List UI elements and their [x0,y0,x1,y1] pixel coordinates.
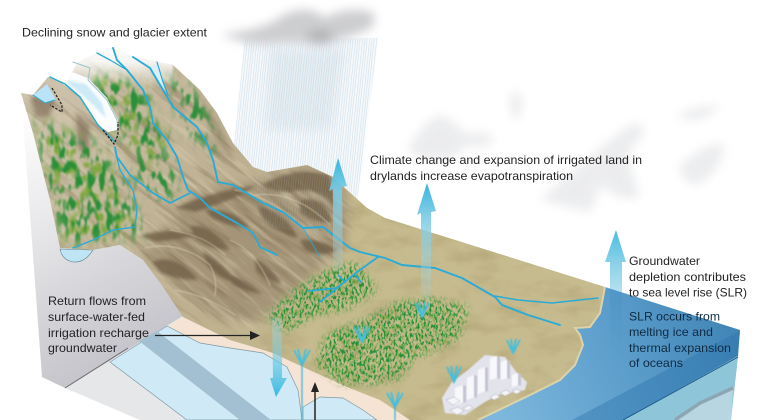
hill massif [145,165,350,320]
text: return flows [48,294,149,355]
well 3 [415,302,429,317]
layer: shallow aquifer [110,326,302,420]
arrow: evapotranspiration from hill [329,158,347,272]
arrow: evapotranspiration from fields [417,183,436,300]
panel: coastal front block [623,357,738,420]
lake [60,249,93,262]
arrow: groundwater to sea level [605,230,626,360]
divider line on wall [65,348,128,388]
plains relief [264,204,596,420]
well 4 [507,339,520,353]
panel: land surface [0,40,620,420]
mountain forest [36,68,218,245]
irrigation canals [308,257,378,302]
text: groundwater depletion: depletion contributes [629,270,746,284]
wells [294,302,520,420]
text: SLR causes: melting ice and [629,325,713,339]
faint rain over the hill [255,170,345,240]
well 5 [447,366,461,382]
text: groundwater depletion: to sea level rise (SLR) [629,286,747,300]
sand fringe [478,287,605,420]
text: climate change: Climate change and expansion of irrigated land in [370,153,642,167]
sea darker strip [572,331,740,420]
irrigated trees: upper field [266,263,378,332]
irrigated trees: lower field [316,298,468,384]
layer: second aquifer [303,397,377,420]
text: return flows: irrigation recharge [48,326,149,340]
text: SLR causes [629,310,731,370]
mountain shading [30,86,235,165]
well 2 [354,326,370,342]
text: groundwater depletion [629,254,747,300]
plains tint [270,190,605,420]
layer: pale rock [65,316,410,420]
panel: sea [478,287,740,420]
text: climate change: drylands increase evapotranspiration [370,169,573,183]
clouds: evapotranspiration haze [408,91,725,212]
layer: confining band [139,331,271,420]
text: return flows: surface-water-fed [48,310,145,324]
hill stripes dark [140,172,338,294]
glacier [55,72,118,132]
text: return flows: Return flows from [48,294,146,308]
text: return flows: groundwater [48,341,117,355]
layer: saltwater edge [623,357,738,420]
text: groundwater depletion: Groundwater [629,254,700,268]
layer: teal water layer [623,357,738,420]
arrow: groundwater pumping up [311,382,319,420]
snow fade on ridge [72,48,174,86]
layer: peach soil [110,317,410,420]
arrow: irrigation return flow down [270,318,287,397]
panel: underground block [65,316,410,420]
layer: band [675,388,733,420]
rain cloud [222,10,374,46]
rivers [33,48,598,325]
hill stripes light [145,190,330,315]
rain [234,38,378,199]
text: SLR causes: thermal expansion [629,341,731,355]
text: SLR causes: SLR occurs from [629,310,720,324]
heading: declining snow: Declining snow and glacier extent [22,26,208,40]
layer: pale layer [675,388,733,420]
panel: grey left wall [21,93,183,388]
text: SLR causes: of oceans [629,356,683,370]
dashed former glacier limit [50,88,118,144]
text: climate change [370,153,642,183]
city [442,355,527,415]
well 1 [294,349,310,420]
small glacier [33,84,56,103]
arrow: return flow pointer [155,331,260,340]
right snow patch [150,62,166,92]
well 6 [387,392,403,420]
mountain and hill streaks [149,150,151,151]
